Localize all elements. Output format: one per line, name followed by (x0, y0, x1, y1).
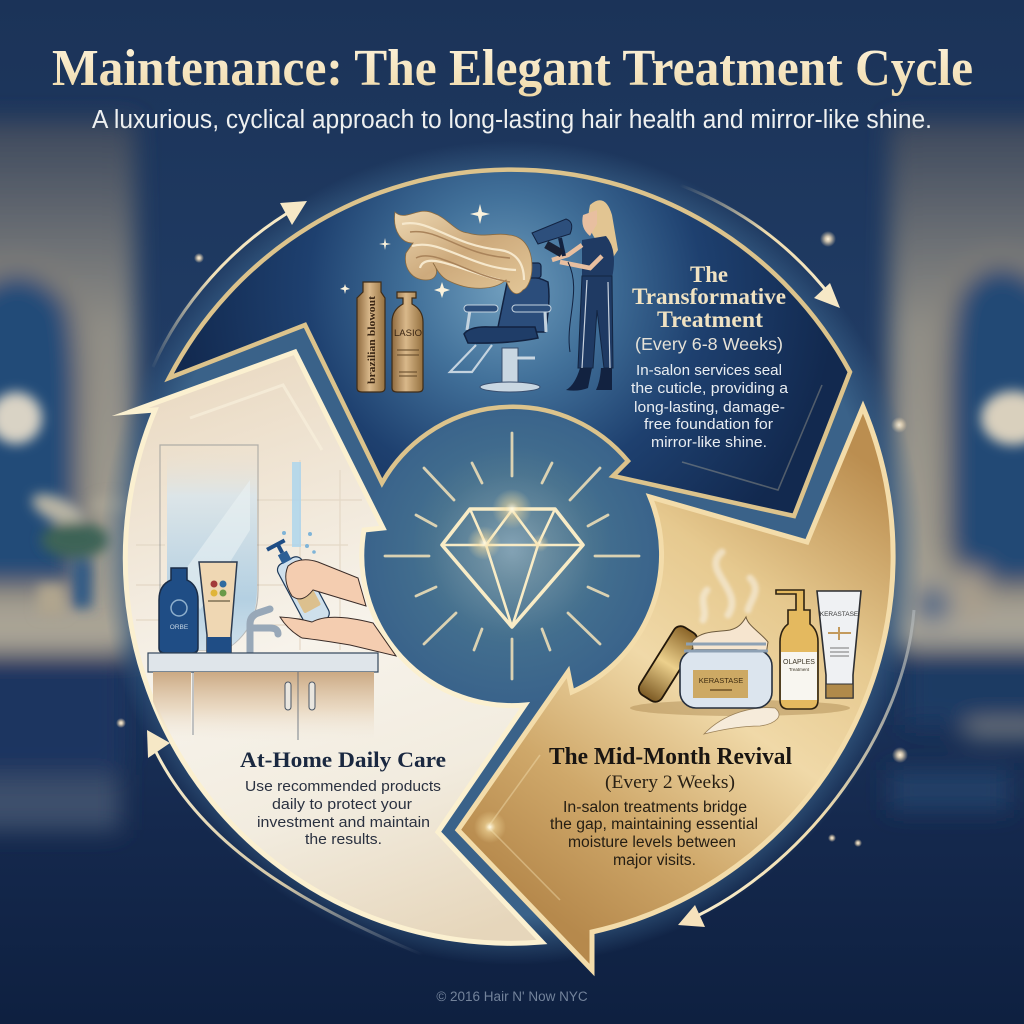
arrow: top left (153, 201, 307, 367)
light rays (385, 433, 639, 679)
diamond outline (442, 509, 583, 627)
bathroom scene illustration (136, 385, 396, 744)
counter and cabinets (148, 653, 378, 744)
text: transformative treatment: mirror-like shine. (651, 434, 767, 451)
steam (703, 552, 755, 620)
text: transformative treatment (631, 362, 789, 451)
salon bottles (357, 282, 423, 392)
hands (280, 560, 396, 656)
panel: the mid-month revival (458, 407, 893, 970)
text: at-home daily care: the results. (305, 831, 382, 848)
heading: transformative treatment: Treatment (657, 307, 763, 332)
subtitle: A luxurious, cyclical approach to long-lasting hair health and mirror-like shine. (92, 106, 932, 134)
cream tube (199, 562, 237, 653)
text: transformative treatment: the cuticle, providing a (631, 380, 789, 397)
pump bottle: OLAPLES (783, 659, 815, 666)
open jar lid (636, 623, 700, 705)
text: at-home daily care (245, 778, 441, 848)
panel: at-home daily care (125, 352, 542, 943)
text: transformative treatment: free foundation for (644, 416, 773, 433)
arrow: top right (680, 185, 840, 308)
text: transformative treatment: long-lasting, damage- (634, 399, 785, 416)
tube: KERASTASE (820, 611, 859, 618)
title: Maintenance: The Elegant Treatment Cycle (52, 40, 973, 97)
frequency: every 6-8 weeks: (Every 6-8 Weeks) (635, 334, 783, 354)
text: mid-month revival: the gap, maintaining essential (550, 816, 758, 833)
salon bottles: brazilian blowout (366, 296, 378, 384)
text: transformative treatment: In-salon services seal (636, 362, 782, 379)
salon chair (450, 263, 551, 392)
jar of mask: KERASTASE (699, 676, 743, 685)
pump bottle in hands (266, 538, 330, 622)
blue bottle: ORBE (170, 624, 189, 631)
salon bottles: LASIO (394, 328, 422, 339)
panel: the transformative treatment (169, 170, 850, 516)
text: mid-month revival: moisture levels between (568, 834, 736, 851)
arrow: bottom left (147, 730, 423, 955)
heading: at-home daily care: At-Home Daily Care (240, 747, 446, 772)
wall tiles (136, 460, 362, 650)
flowing blonde hair (394, 211, 532, 294)
water droplets (282, 531, 316, 554)
jar of mask (680, 617, 772, 708)
heading: transformative treatment: The (690, 262, 728, 287)
heading: mid-month revival: The Mid-Month Revival (549, 744, 792, 770)
hair dryer and brush (532, 219, 572, 257)
heading: transformative treatment: Transformative (632, 284, 786, 309)
text: mid-month revival: major visits. (613, 852, 696, 869)
pump bottle (776, 590, 818, 709)
cream smear (704, 708, 779, 734)
pump bottle: Treatment (789, 667, 810, 672)
sparkles (340, 204, 490, 298)
text: mid-month revival (550, 799, 758, 869)
cycle backing disc (100, 141, 924, 965)
text: at-home daily care: investment and maintain (257, 814, 430, 831)
text: mid-month revival: In-salon treatments bridge (563, 799, 747, 816)
stylist (552, 200, 618, 391)
mirror (160, 445, 258, 650)
footer copyright: © 2016 Hair N' Now NYC (436, 989, 588, 1004)
products illustration (630, 552, 861, 734)
text: at-home daily care: Use recommended products (245, 778, 441, 795)
icon: glowing diamond (385, 433, 639, 679)
blue bottle (159, 568, 198, 653)
centre disc (362, 403, 662, 703)
water stream (292, 462, 301, 547)
text: at-home daily care: daily to protect your (272, 796, 412, 813)
arrow: bottom right (678, 610, 914, 927)
tube (817, 591, 861, 698)
heading: transformative treatment (632, 262, 786, 332)
faucet (250, 609, 278, 653)
frequency: every 2 weeks: (Every 2 Weeks) (605, 772, 735, 793)
